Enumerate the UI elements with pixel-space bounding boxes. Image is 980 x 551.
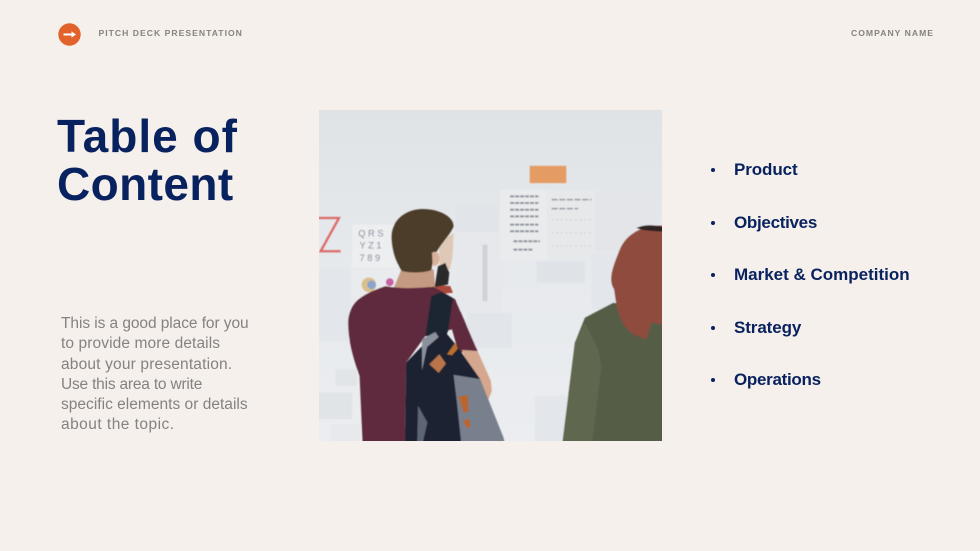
poster characters: Q R S	[358, 228, 383, 238]
description text: Use this area to write	[61, 376, 202, 393]
list item: Market & Competition: Market & Competition	[734, 265, 910, 284]
title	[57, 110, 238, 210]
icon: orange arrow badge	[58, 23, 81, 46]
list item: Strategy: Strategy	[734, 318, 801, 336]
description text: to provide more details	[61, 335, 220, 352]
description text: about the topic.	[61, 416, 175, 433]
man	[348, 209, 491, 449]
wall papers	[312, 190, 657, 449]
description text: This is a good place for you	[61, 315, 249, 332]
list item: Operations: Operations	[734, 370, 821, 389]
title: Table of	[57, 110, 238, 162]
color wheel	[361, 277, 376, 292]
poster characters: Y Z 1	[359, 241, 381, 251]
photo: two people looking at a wall of papers	[319, 110, 662, 441]
bullet list	[711, 160, 910, 389]
red letter Z	[315, 218, 340, 251]
header label: PITCH DECK PRESENTATION	[98, 28, 243, 38]
company name: COMPANY NAME	[851, 28, 934, 38]
description text: about your presentation.	[61, 356, 232, 373]
list item: Product: Product	[734, 160, 798, 179]
poster characters: 7 8 9	[359, 253, 380, 263]
description text: specific elements or details	[61, 396, 248, 413]
woman	[561, 225, 671, 449]
orange sign	[529, 166, 566, 183]
poster characters	[358, 228, 383, 263]
title: Content	[57, 158, 234, 210]
list item: Objectives: Objectives	[734, 213, 817, 232]
description text	[61, 315, 249, 433]
backpack	[404, 292, 506, 449]
